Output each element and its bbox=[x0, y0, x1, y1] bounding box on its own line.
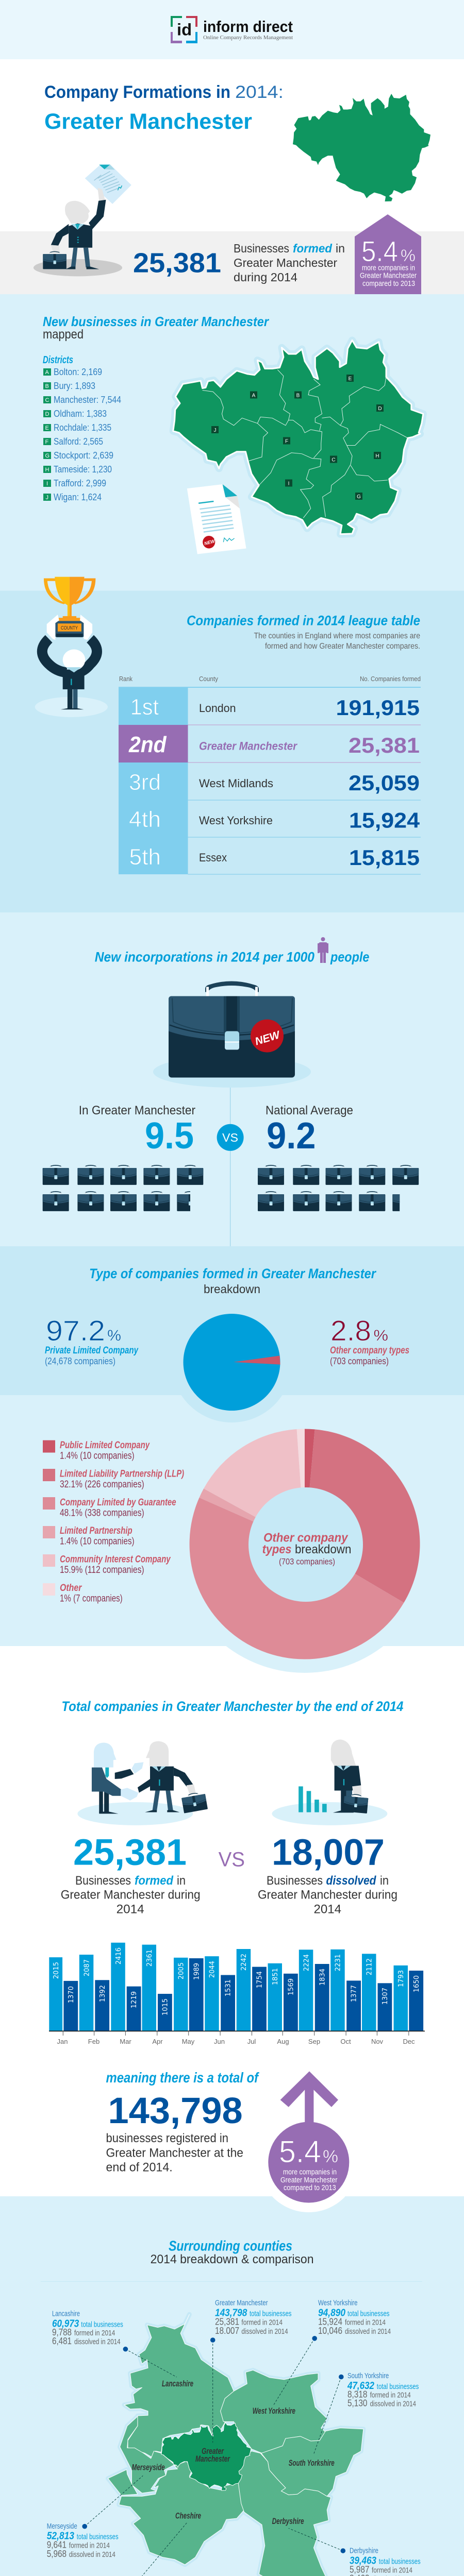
icon: document with new stamp bbox=[187, 484, 246, 554]
county name labels: Lancashire bbox=[162, 2379, 193, 2388]
county column: Greater Manchester bbox=[199, 740, 297, 752]
stats: formed vs dissolved: Businesses bbox=[267, 1874, 323, 1888]
donut centre label bbox=[262, 1531, 351, 1567]
legend: other company types: 15.9% (112 companies) bbox=[60, 1565, 144, 1575]
legend: other company types: Public Limited Company bbox=[60, 1440, 150, 1451]
county stats: Lancashire: 9,788 bbox=[52, 2327, 72, 2337]
legend: other company types bbox=[43, 1440, 184, 1604]
month labels: Oct bbox=[340, 2038, 351, 2045]
month labels bbox=[57, 2038, 415, 2045]
county stats: Merseyside: formed in 2014 bbox=[69, 2541, 110, 2550]
county name labels: Cheshire bbox=[175, 2511, 201, 2521]
county stats: Derbyshire bbox=[350, 2547, 421, 2576]
callout: 5.4% up arrow: % bbox=[323, 2147, 338, 2166]
stats: formed vs dissolved: formed bbox=[135, 1874, 174, 1888]
county stats: South Yorkshire: 8,318 bbox=[347, 2389, 367, 2400]
rank column: 1st bbox=[130, 694, 159, 720]
axis bbox=[49, 2031, 425, 2036]
illustration: two businessmen shaking hands bbox=[77, 1741, 196, 1825]
county stats: Lancashire: dissolved in 2014 bbox=[74, 2337, 121, 2346]
bar value labels: 2224 bbox=[303, 1954, 310, 1971]
county stats: Lancashire: formed in 2014 bbox=[74, 2329, 115, 2337]
icon: large briefcase with new sticker bbox=[153, 981, 311, 1088]
leader lines and dots bbox=[82, 2336, 345, 2576]
stat: other company types: (703 companies) bbox=[330, 1356, 389, 1366]
legend: districts list: D bbox=[45, 411, 49, 417]
legend: districts list: A bbox=[45, 369, 49, 376]
county stats: West Yorkshire: total businesses bbox=[347, 2309, 390, 2318]
donut chart: other company types breakdown bbox=[176, 1415, 434, 1673]
hands and arms bbox=[42, 615, 97, 672]
icon: person bbox=[318, 937, 328, 963]
arrow bbox=[280, 2071, 338, 2124]
stats: formed vs dissolved: Businesses bbox=[75, 1874, 131, 1888]
stat: total of 143,798 businesses: Greater Manchester at the bbox=[106, 2146, 243, 2160]
stat: 25,381 businesses formed: Greater Manchester bbox=[234, 256, 337, 269]
stats: formed vs dissolved: in bbox=[380, 1874, 389, 1888]
county name labels: Manchester bbox=[195, 2454, 230, 2464]
comparison: incorporations per 1000: 9.2 bbox=[267, 1115, 316, 1157]
bar value labels: 1392 bbox=[99, 1985, 107, 2002]
stats: formed vs dissolved: in bbox=[177, 1874, 186, 1888]
stat: 25,381 businesses formed bbox=[133, 242, 345, 284]
stats: formed vs dissolved: Greater Manchester during bbox=[61, 1888, 201, 1902]
donut centre label: types bbox=[262, 1543, 292, 1556]
stats: formed vs dissolved: 2014 bbox=[313, 1902, 341, 1917]
bar chart: formed and dissolved by month bbox=[49, 1943, 425, 2045]
county stats: West Yorkshire bbox=[318, 2299, 391, 2336]
stat: other company types bbox=[330, 1314, 409, 1366]
county name labels: Derbyshire bbox=[272, 2516, 304, 2526]
callout: 5.4% up arrow: compared to 2013 bbox=[284, 2184, 336, 2192]
month labels: May bbox=[182, 2038, 195, 2045]
heading: type of companies: breakdown bbox=[204, 1282, 260, 1296]
legend: districts list: G bbox=[45, 453, 49, 459]
heading: type of companies: Type of companies formed in Greater Manchester bbox=[89, 1266, 376, 1281]
county name labels: West Yorkshire bbox=[253, 2406, 295, 2416]
values column: 25,059 bbox=[349, 771, 420, 795]
heading: companies formed league table: formed and how Greater Manchester compares. bbox=[265, 642, 420, 651]
stat: total of 143,798 businesses: 143,798 bbox=[108, 2091, 243, 2131]
trophy bbox=[44, 577, 95, 637]
rank column bbox=[128, 694, 167, 870]
bar value labels: 2015 bbox=[53, 1962, 60, 1979]
legend: other company types: Other bbox=[60, 1583, 82, 1594]
icon: briefcase held by right businessman bbox=[181, 1791, 208, 1814]
icon: briefcase held by dissolving businessman bbox=[343, 1793, 369, 1814]
legend: other company types: Community Interest Company bbox=[60, 1554, 171, 1565]
county column: West Yorkshire bbox=[199, 814, 273, 827]
stat: private limited company bbox=[45, 1314, 139, 1366]
formed bars bbox=[49, 1943, 408, 2031]
comparison: incorporations per 1000: In Greater Manchester bbox=[79, 1104, 195, 1117]
logo: inform direct: Online Company Records Management bbox=[203, 35, 293, 41]
rank column: 4th bbox=[129, 807, 161, 832]
logo: inform direct bbox=[171, 16, 293, 43]
month labels: Apr bbox=[152, 2038, 163, 2045]
county stats: South Yorkshire: formed in 2014 bbox=[370, 2391, 411, 2400]
county stats: Lancashire: total businesses bbox=[81, 2320, 123, 2329]
donut centre label: Other company bbox=[263, 1531, 349, 1545]
table: companies formed league table bbox=[119, 675, 421, 875]
heading: surrounding counties: 2014 breakdown & comparison bbox=[151, 2252, 313, 2266]
ground shadow bbox=[35, 697, 108, 717]
stat: other company types: 2.8 bbox=[330, 1314, 371, 1347]
table header: Rank bbox=[119, 675, 132, 683]
stat: private limited company: (24,678 companies) bbox=[45, 1356, 115, 1366]
stats: formed vs dissolved bbox=[61, 1833, 397, 1917]
legend: districts list: I bbox=[46, 481, 48, 487]
heading: companies formed league table: The counties in England where most companies are bbox=[254, 632, 420, 640]
bar value labels: 1754 bbox=[256, 1971, 264, 1988]
callout: 5.4% up arrow: more companies in bbox=[283, 2168, 337, 2176]
legend: other company types: 1% (7 companies) bbox=[60, 1594, 123, 1604]
legend: districts list bbox=[43, 354, 121, 502]
document bbox=[85, 164, 131, 204]
stat: other company types: Other company types bbox=[330, 1345, 409, 1356]
callout: 5.4% up arrow: 5.4 bbox=[279, 2134, 321, 2169]
heading: companies formed league table bbox=[187, 613, 420, 651]
map: surrounding counties bbox=[108, 2314, 363, 2576]
pie chart: company types bbox=[171, 1302, 292, 1422]
county stats: South Yorkshire: South Yorkshire bbox=[347, 2372, 389, 2380]
month labels: Jul bbox=[247, 2038, 256, 2045]
dissolved bars bbox=[63, 1958, 423, 2031]
callout: 5.4% up arrow bbox=[259, 2071, 359, 2212]
comparison: incorporations per 1000: 9.5 bbox=[145, 1115, 194, 1157]
donut centre label: (703 companies) bbox=[279, 1557, 335, 1567]
bar value labels: 1793 bbox=[397, 1970, 405, 1987]
legend: other company types: 48.1% (338 companies) bbox=[60, 1507, 144, 1518]
county stats: Merseyside: dissolved in 2014 bbox=[69, 2550, 115, 2559]
month labels: Jan bbox=[57, 2038, 68, 2045]
legend: other company types: 32.1% (226 companies) bbox=[60, 1479, 144, 1490]
ground shadow bbox=[34, 259, 122, 276]
heading: surrounding counties: Surrounding counties bbox=[169, 2238, 292, 2254]
county stats: West Yorkshire: formed in 2014 bbox=[345, 2318, 386, 2327]
heading: new incorporations per 1000 people: people bbox=[330, 949, 369, 964]
county stats: South Yorkshire bbox=[347, 2372, 419, 2409]
legend: districts list: Manchester: 7,544 bbox=[54, 395, 121, 405]
county stats: Merseyside bbox=[47, 2522, 119, 2559]
stats: formed vs dissolved: 25,381 bbox=[73, 1833, 187, 1873]
district markers: H bbox=[375, 453, 379, 459]
legend: districts list: Trafford: 2,999 bbox=[54, 478, 106, 488]
stats: formed vs dissolved: VS bbox=[219, 1848, 245, 1871]
legend: districts list: C bbox=[45, 397, 49, 403]
month labels: Feb bbox=[88, 2038, 100, 2045]
bar value labels bbox=[53, 1947, 421, 2015]
stat: 25,381 businesses formed: 25,381 bbox=[133, 247, 221, 278]
county stats: Merseyside: 9,641 bbox=[47, 2540, 67, 2550]
bar value labels: 2112 bbox=[366, 1958, 373, 1975]
county stats: Greater Manchester: Greater Manchester bbox=[215, 2299, 268, 2308]
county stats: Merseyside: Merseyside bbox=[47, 2522, 77, 2531]
title bbox=[44, 82, 284, 134]
bar value labels: 1989 bbox=[193, 1963, 201, 1980]
rank column: 2nd bbox=[128, 732, 167, 757]
logo: inform direct: id bbox=[177, 21, 192, 39]
legend: other company types: 1.4% (10 companies) bbox=[60, 1536, 135, 1547]
bar value labels: 1219 bbox=[130, 1991, 138, 2008]
county stats: Lancashire bbox=[52, 2310, 123, 2346]
callout: 5.4% more companies house bbox=[355, 214, 421, 294]
county stats: West Yorkshire: 15,924 bbox=[318, 2317, 342, 2327]
stat: private limited company: 97.2 bbox=[46, 1314, 105, 1347]
month labels: Sep bbox=[308, 2038, 320, 2045]
county stats: West Yorkshire: 10,046 bbox=[318, 2326, 342, 2336]
title: 2014: bbox=[235, 82, 284, 102]
legend: districts list: Wigan: 1,624 bbox=[54, 492, 102, 502]
legend: districts list: Tameside: 1,230 bbox=[54, 464, 112, 474]
bar value labels: 1307 bbox=[382, 1988, 389, 2005]
district markers: A bbox=[252, 393, 256, 399]
bar value labels: 2242 bbox=[240, 1954, 248, 1971]
legend: districts list: Districts bbox=[43, 354, 73, 366]
county stats: Greater Manchester: formed in 2014 bbox=[241, 2318, 283, 2327]
bar value labels: 1377 bbox=[351, 1985, 358, 2002]
legend: districts list: Rochdale: 1,335 bbox=[54, 422, 111, 433]
district markers: F bbox=[285, 439, 288, 444]
figure body bbox=[61, 649, 85, 709]
stats: formed vs dissolved: 2014 bbox=[117, 1902, 144, 1917]
bar value labels: 1650 bbox=[413, 1975, 421, 1992]
bar value labels: 1834 bbox=[319, 1969, 326, 1986]
district markers: J bbox=[213, 428, 217, 433]
county stats: Derbyshire: 39,463 bbox=[350, 2555, 376, 2566]
heading: type of companies bbox=[89, 1266, 376, 1296]
values column: 15,924 bbox=[349, 808, 420, 833]
legend: districts list: H bbox=[45, 467, 49, 473]
county stats: Merseyside: total businesses bbox=[77, 2533, 119, 2541]
month labels: Nov bbox=[371, 2038, 384, 2045]
stat: 25,381 businesses formed: in bbox=[336, 242, 345, 255]
heading: new businesses mapped: New businesses in Greater Manchester bbox=[43, 314, 270, 329]
logo: inform direct: inform direct bbox=[203, 18, 293, 36]
rank column: 3rd bbox=[129, 770, 161, 795]
district markers: C bbox=[332, 457, 336, 463]
values column: 191,915 bbox=[336, 696, 420, 720]
title: Greater Manchester bbox=[44, 109, 252, 134]
county stats: Merseyside: 52,813 bbox=[47, 2531, 74, 2542]
legend: districts list: Oldham: 1,383 bbox=[54, 409, 107, 419]
heading: new businesses mapped: mapped bbox=[43, 327, 84, 342]
legend: districts list: Salford: 2,565 bbox=[54, 436, 103, 447]
bar value labels: 2361 bbox=[146, 1950, 154, 1967]
month labels: Aug bbox=[277, 2038, 289, 2045]
table header: County bbox=[199, 675, 218, 683]
callout: 5.4% more companies house: 5.4 bbox=[361, 235, 398, 267]
county stats: South Yorkshire: total businesses bbox=[377, 2382, 419, 2391]
comparison: incorporations per 1000 bbox=[79, 1104, 353, 1157]
comparison: incorporations per 1000: National Average bbox=[266, 1104, 353, 1117]
county column: Essex bbox=[199, 851, 227, 864]
icon: large briefcase with new sticker: NEW bbox=[254, 1029, 282, 1048]
county stats: West Yorkshire: 94,890 bbox=[318, 2307, 345, 2318]
bar value labels: 1569 bbox=[288, 1978, 295, 1995]
county stats: Derbyshire: total businesses bbox=[379, 2557, 421, 2566]
legend: districts list: Bolton: 2,169 bbox=[54, 367, 102, 377]
legend: districts list: B bbox=[45, 383, 49, 389]
bar value labels: 1015 bbox=[162, 1998, 169, 2015]
callout: 5.4% more companies house: Greater Manchester bbox=[360, 272, 417, 280]
county stats: Derbyshire: 5,987 bbox=[350, 2565, 369, 2575]
stat: total of 143,798 businesses bbox=[106, 2070, 259, 2174]
bar value labels: 1531 bbox=[225, 1979, 233, 1996]
county name labels: South Yorkshire bbox=[289, 2458, 335, 2468]
values column: 15,815 bbox=[349, 845, 420, 870]
month labels: Dec bbox=[403, 2038, 415, 2045]
heading: surrounding counties bbox=[151, 2238, 313, 2266]
county stats: South Yorkshire: 47,632 bbox=[347, 2380, 374, 2392]
figure bbox=[51, 188, 106, 269]
district markers: B bbox=[296, 393, 300, 399]
callout: 5.4% more companies house: % bbox=[401, 246, 416, 265]
county stats: Greater Manchester: 18.007 bbox=[215, 2326, 239, 2336]
county stats: Greater Manchester: total businesses bbox=[250, 2309, 292, 2318]
stat: 25,381 businesses formed: Businesses bbox=[234, 242, 289, 255]
icon: small briefcase held by man bbox=[43, 251, 67, 269]
district markers: D bbox=[378, 406, 382, 412]
county stats: Derbyshire: formed in 2014 bbox=[372, 2566, 412, 2575]
legend: districts list: Stockport: 2,639 bbox=[54, 450, 113, 461]
table header: No. Companies formed bbox=[360, 675, 421, 683]
legend: other company types: Limited Partnership bbox=[60, 1526, 132, 1536]
county stats: Lancashire: 60,973 bbox=[52, 2318, 79, 2329]
stats: formed vs dissolved: 18,007 bbox=[272, 1833, 385, 1873]
county stats: Greater Manchester: dissolved in 2014 bbox=[241, 2327, 288, 2336]
legend: districts list: Bury: 1,893 bbox=[54, 381, 95, 391]
district markers: I bbox=[288, 481, 289, 486]
county stats: Lancashire: Lancashire bbox=[52, 2310, 80, 2318]
legend: other company types: Limited Liability Partnership (LLP) bbox=[60, 1468, 184, 1480]
heading: companies formed league table: Companies formed in 2014 league table bbox=[187, 613, 420, 629]
county stats: South Yorkshire: 5,130 bbox=[347, 2398, 367, 2409]
county stats: South Yorkshire: dissolved in 2014 bbox=[370, 2400, 416, 2409]
legend: districts list: J bbox=[45, 495, 48, 501]
county column: West Midlands bbox=[199, 777, 273, 790]
stat: total of 143,798 businesses: businesses registered in bbox=[106, 2131, 228, 2145]
county column bbox=[199, 702, 297, 864]
callout: 5.4% more companies house: more companies in bbox=[362, 264, 415, 272]
stat: other company types: % bbox=[373, 1327, 388, 1344]
heading: total companies: Total companies in Greater Manchester by the end of 2014 bbox=[61, 1699, 403, 1714]
comparison: incorporations per 1000: VS bbox=[222, 1131, 238, 1144]
county column: London bbox=[199, 702, 236, 715]
pictogram: 9.2 briefcases bbox=[258, 1165, 419, 1211]
heading: new businesses mapped bbox=[43, 314, 270, 342]
county name labels bbox=[132, 2379, 335, 2526]
legend: districts list: F bbox=[45, 439, 48, 445]
legend: other company types: 1.4% (10 companies) bbox=[60, 1450, 135, 1461]
values column bbox=[336, 696, 420, 870]
illustration: man raising document bbox=[34, 164, 131, 276]
stat: 25,381 businesses formed: formed bbox=[293, 242, 333, 255]
stat: private limited company: Private Limited Company bbox=[45, 1345, 139, 1356]
bar value labels: 1370 bbox=[68, 1986, 75, 2003]
map: Greater Manchester districts bbox=[173, 340, 423, 534]
county stats: Greater Manchester: 143,798 bbox=[215, 2307, 247, 2318]
bar value labels: 2231 bbox=[335, 1954, 342, 1971]
stat: 25,381 businesses formed: during 2014 bbox=[234, 270, 297, 284]
county stats: Greater Manchester: 25,381 bbox=[215, 2317, 239, 2327]
map: Greater Manchester silhouette bbox=[293, 94, 430, 201]
heading: new incorporations per 1000 people: New incorporations in 2014 per 1000 bbox=[95, 949, 314, 964]
title: Company Formations in bbox=[44, 82, 230, 102]
callout: 5.4% more companies house: compared to 2013 bbox=[362, 280, 415, 288]
legend: districts list: E bbox=[45, 425, 49, 431]
county stats: Derbyshire: Derbyshire bbox=[350, 2547, 378, 2555]
illustration: man holding county trophy bbox=[35, 577, 108, 717]
district markers: G bbox=[357, 494, 361, 500]
stat: private limited company: % bbox=[107, 1327, 121, 1344]
county stats: West Yorkshire: dissolved in 2014 bbox=[345, 2327, 391, 2336]
county name labels: Greater bbox=[202, 2446, 224, 2456]
bar value labels: 2416 bbox=[115, 1947, 123, 1964]
bar value labels: 2005 bbox=[177, 1962, 186, 1979]
month labels: Jun bbox=[214, 2038, 225, 2045]
bar value labels: 2044 bbox=[209, 1961, 217, 1978]
stamp label: NEW bbox=[204, 538, 216, 546]
district markers: E bbox=[349, 376, 352, 382]
county stats: Greater Manchester bbox=[215, 2299, 292, 2336]
district markers bbox=[211, 375, 384, 500]
stat: total of 143,798 businesses: end of 2014. bbox=[106, 2160, 173, 2174]
donut centre label: breakdown bbox=[295, 1543, 351, 1556]
pictogram: 9.5 briefcases bbox=[43, 1165, 203, 1211]
trophy label: COUNTY bbox=[61, 625, 78, 631]
table header bbox=[119, 675, 421, 683]
county stats: West Yorkshire: West Yorkshire bbox=[318, 2299, 358, 2308]
stats: formed vs dissolved: dissolved bbox=[326, 1874, 377, 1888]
county stats: Merseyside: 5,968 bbox=[47, 2549, 67, 2559]
county name labels: Merseyside bbox=[132, 2463, 165, 2472]
illustration: businessman with falling bar chart bbox=[272, 1739, 387, 1825]
rank column: 5th bbox=[129, 844, 161, 870]
bar value labels: 1851 bbox=[272, 1968, 279, 1985]
county stats: Lancashire: 6,481 bbox=[52, 2336, 72, 2346]
bar value labels: 2087 bbox=[83, 1959, 91, 1976]
month labels: Mar bbox=[120, 2038, 131, 2045]
heading: new incorporations per 1000 people bbox=[95, 937, 369, 964]
stats: formed vs dissolved: Greater Manchester during bbox=[258, 1888, 397, 1902]
values column: 25,381 bbox=[349, 733, 420, 757]
stat: total of 143,798 businesses: meaning there is a total of bbox=[106, 2070, 259, 2086]
legend: other company types: Company Limited by Guarantee bbox=[60, 1497, 176, 1508]
callout: 5.4% up arrow: Greater Manchester bbox=[280, 2176, 338, 2184]
